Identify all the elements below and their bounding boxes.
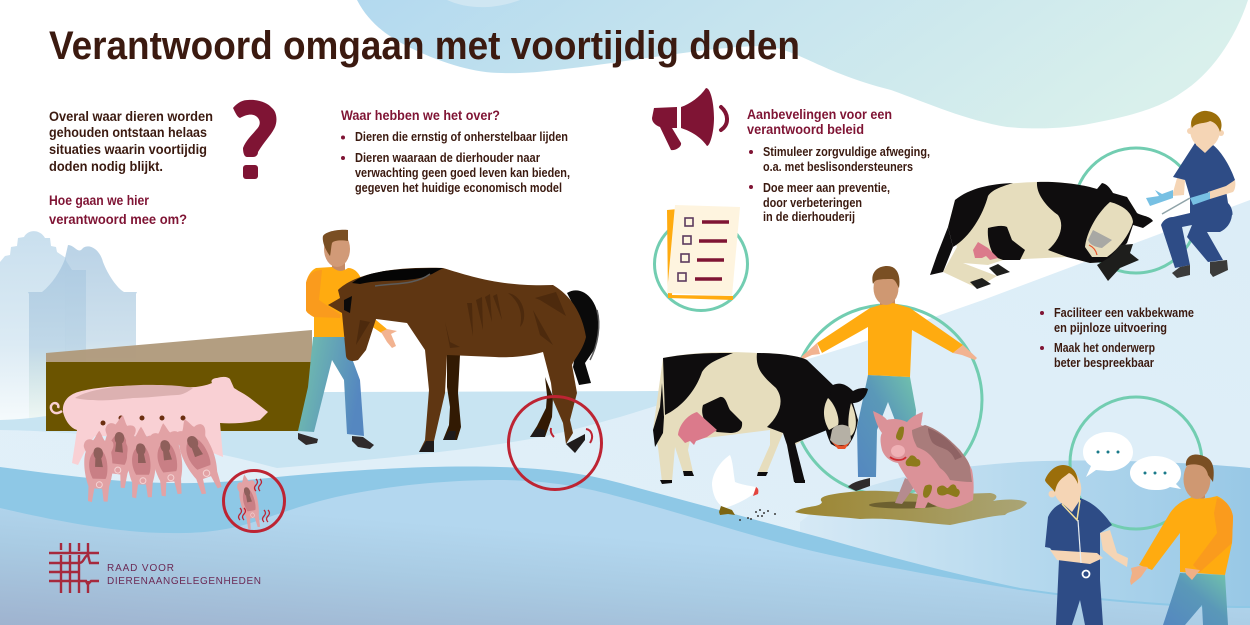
- text block: aanbevelingen: [747, 107, 930, 224]
- text block: intro: [49, 108, 213, 174]
- title: Verantwoord omgaan met voortijdig doden: [49, 24, 800, 68]
- text block: aanbevelingen: Aanbevelingen voor een: [747, 107, 892, 122]
- background: ground layers: [0, 200, 1250, 625]
- text block: recommendations right: [1040, 306, 1194, 370]
- logo text: [107, 563, 261, 587]
- text block: aanbevelingen: Stimuleer zorgvuldige afweging,: [763, 145, 930, 159]
- logo text: RAAD VOOR: [107, 563, 174, 574]
- text block: recommendations right: en pijnloze uitvoering: [1054, 321, 1167, 335]
- figure: vet euthanising cow: [930, 111, 1235, 289]
- logo: Raad voor Dierenaangelegenheden: [49, 543, 261, 593]
- text block: aanbevelingen: verantwoord beleid: [747, 122, 864, 137]
- text block: recommendations right: beter bespreekbaar: [1054, 356, 1154, 370]
- man: [1130, 454, 1233, 625]
- text block: intro: doden nodig blijkt.: [49, 158, 163, 174]
- background: front ground bands: [0, 430, 1250, 625]
- text block: waar hebben we het over: gegeven het huidige economisch model: [355, 181, 562, 195]
- text block: question: verantwoord mee om?: [49, 211, 187, 227]
- background: small light cloud: [447, 0, 520, 7]
- text block: waar hebben we het over: Dieren die ernstig of onherstelbaar lijden: [355, 130, 568, 144]
- lying cow: [930, 182, 1153, 289]
- text block: intro: gehouden ontstaan helaas: [49, 124, 207, 140]
- text block: aanbevelingen: o.a. met beslisondersteuners: [763, 160, 913, 174]
- piglets: [82, 413, 226, 503]
- text block: recommendations right: Maak het onderwerp: [1054, 341, 1155, 355]
- illustration: chicken pecking: [712, 455, 776, 521]
- callout: cold piglet in red circle: [224, 470, 284, 532]
- icon: megaphone: [652, 88, 727, 150]
- logo mark: [49, 543, 99, 593]
- text block: waar hebben we het over: Dieren waaraan de dierhouder naar: [355, 151, 540, 165]
- logo text: DIERENAANGELEGENHEDEN: [107, 576, 261, 587]
- illustration: sow with piglets: [51, 377, 268, 503]
- text block: aanbevelingen: in de dierhouderij: [763, 210, 855, 224]
- buildings silhouette: [0, 231, 137, 420]
- text block: waar hebben we het over: Waar hebben we het over?: [341, 108, 500, 123]
- veterinarian: [1146, 111, 1235, 278]
- figure: man with open arms and circle: [792, 266, 982, 495]
- figure: man with horse: [298, 230, 599, 453]
- text block: intro: situaties waarin voortijdig: [49, 141, 207, 157]
- illustration: mud puddle: [795, 491, 1027, 525]
- callout: hoof in red circle: [508, 396, 602, 490]
- text block: question: [49, 192, 187, 227]
- speech bubble right: [1130, 456, 1181, 490]
- background: barn: [46, 330, 312, 431]
- text block: aanbevelingen: door verbeteringen: [763, 196, 862, 210]
- horse: [328, 268, 599, 453]
- doctor: [1045, 465, 1128, 625]
- text block: recommendations right: Faciliteer een vakbekwame: [1054, 306, 1194, 320]
- text block: question: Hoe gaan we hier: [49, 192, 149, 208]
- teats: [100, 416, 186, 426]
- speech bubble left: [1083, 432, 1133, 477]
- figure: doctor and man in conversation: [1045, 397, 1233, 625]
- illustration: cow standing: [653, 352, 868, 484]
- illustration: muddy pig sitting: [869, 411, 974, 509]
- icon: question mark: [233, 100, 276, 179]
- background: top right sky blob: [357, 0, 1248, 128]
- text block: aanbevelingen: Doe meer aan preventie,: [763, 181, 890, 195]
- icon: checklist in circle: [654, 205, 748, 310]
- text block: waar hebben we het over: [341, 108, 570, 195]
- text block: intro: Overal waar dieren worden: [49, 108, 213, 124]
- text block: waar hebben we het over: verwachting geen goed leven kan bieden,: [355, 166, 570, 180]
